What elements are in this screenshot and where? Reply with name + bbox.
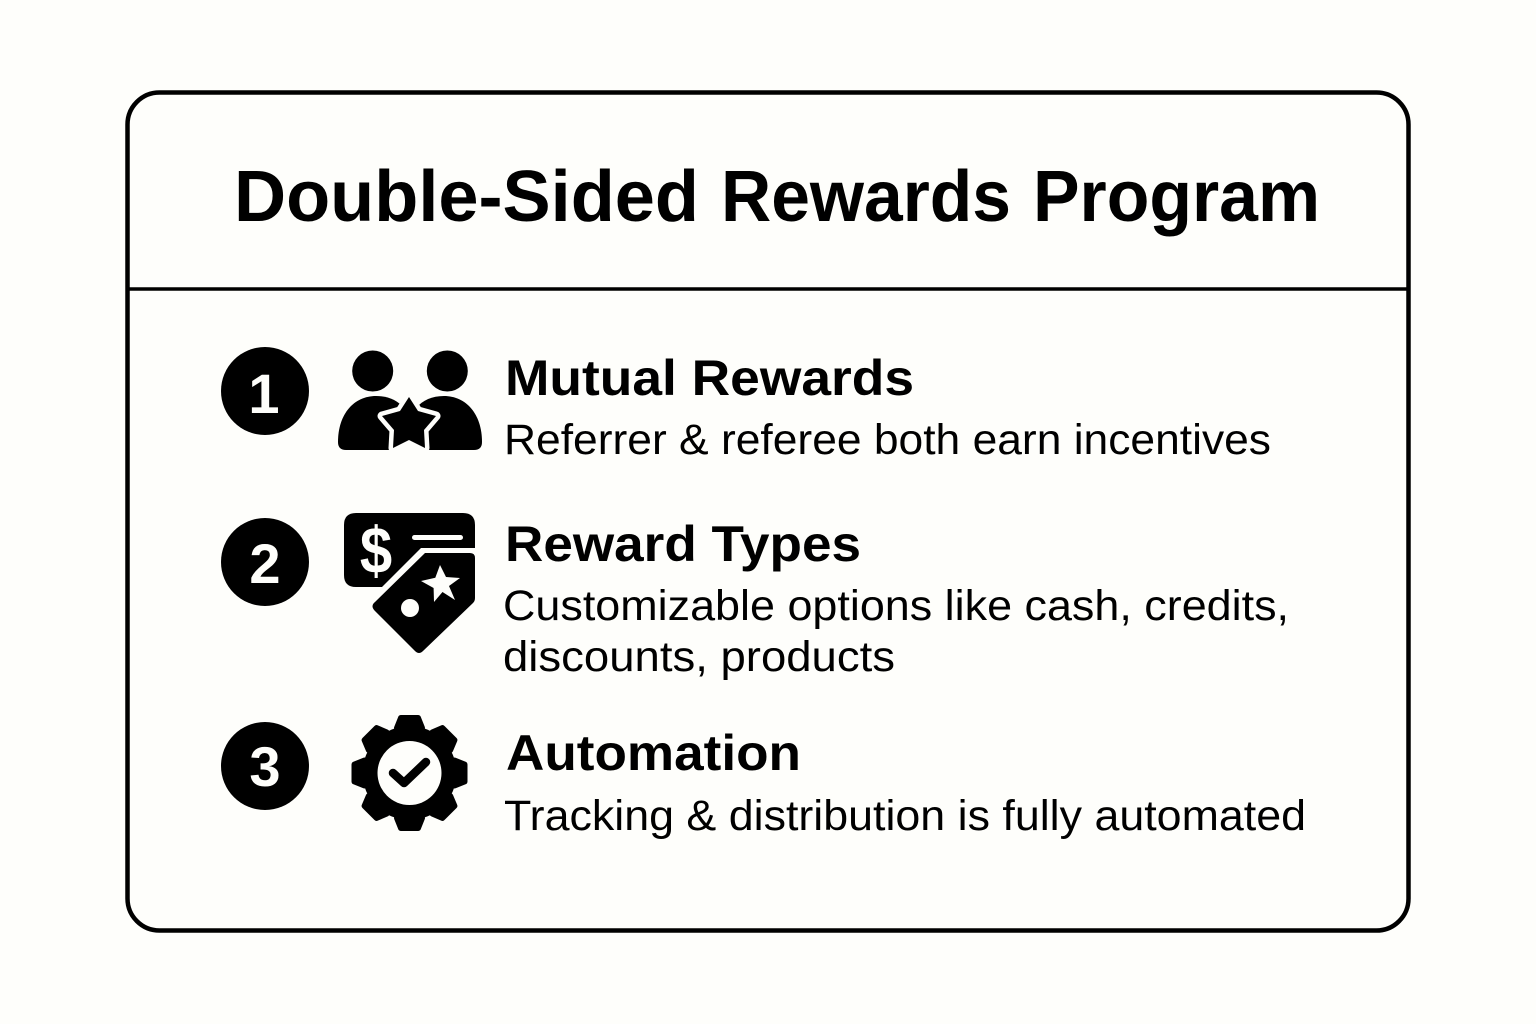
number badge 1: 1	[248, 362, 280, 425]
icon: gear with check	[354, 718, 464, 828]
heading: Automation: Automation	[506, 725, 801, 781]
icon: cash card and tag: $	[360, 515, 392, 588]
title	[234, 157, 1320, 237]
icon: two people with star	[338, 350, 482, 450]
number badge 3	[221, 722, 309, 810]
number badge 2: 2	[249, 532, 281, 595]
title: Program	[1033, 157, 1320, 237]
description: mutual rewards: Referrer & referee both earn incentives	[504, 416, 1271, 464]
panel: rewards card	[128, 92, 1408, 930]
step 3: automation	[221, 718, 1306, 840]
description: automation: Tracking & distribution is fully automated	[504, 792, 1306, 840]
step 1: mutual rewards	[221, 347, 1271, 464]
title: Double-Sided	[234, 157, 699, 237]
heading: Reward Types: Reward Types	[505, 516, 861, 572]
icon: cash card and tag	[344, 513, 475, 653]
heading: Mutual Rewards: Mutual Rewards	[505, 350, 914, 406]
description: reward types: Customizable options like cash, credits,	[503, 582, 1289, 630]
description: reward types line 2: discounts, products	[503, 633, 895, 681]
title: Rewards	[721, 157, 1011, 237]
step 2: reward types	[221, 513, 1289, 681]
number badge 2	[221, 518, 309, 606]
number badge 3: 3	[249, 735, 281, 798]
number badge 1	[221, 347, 309, 435]
